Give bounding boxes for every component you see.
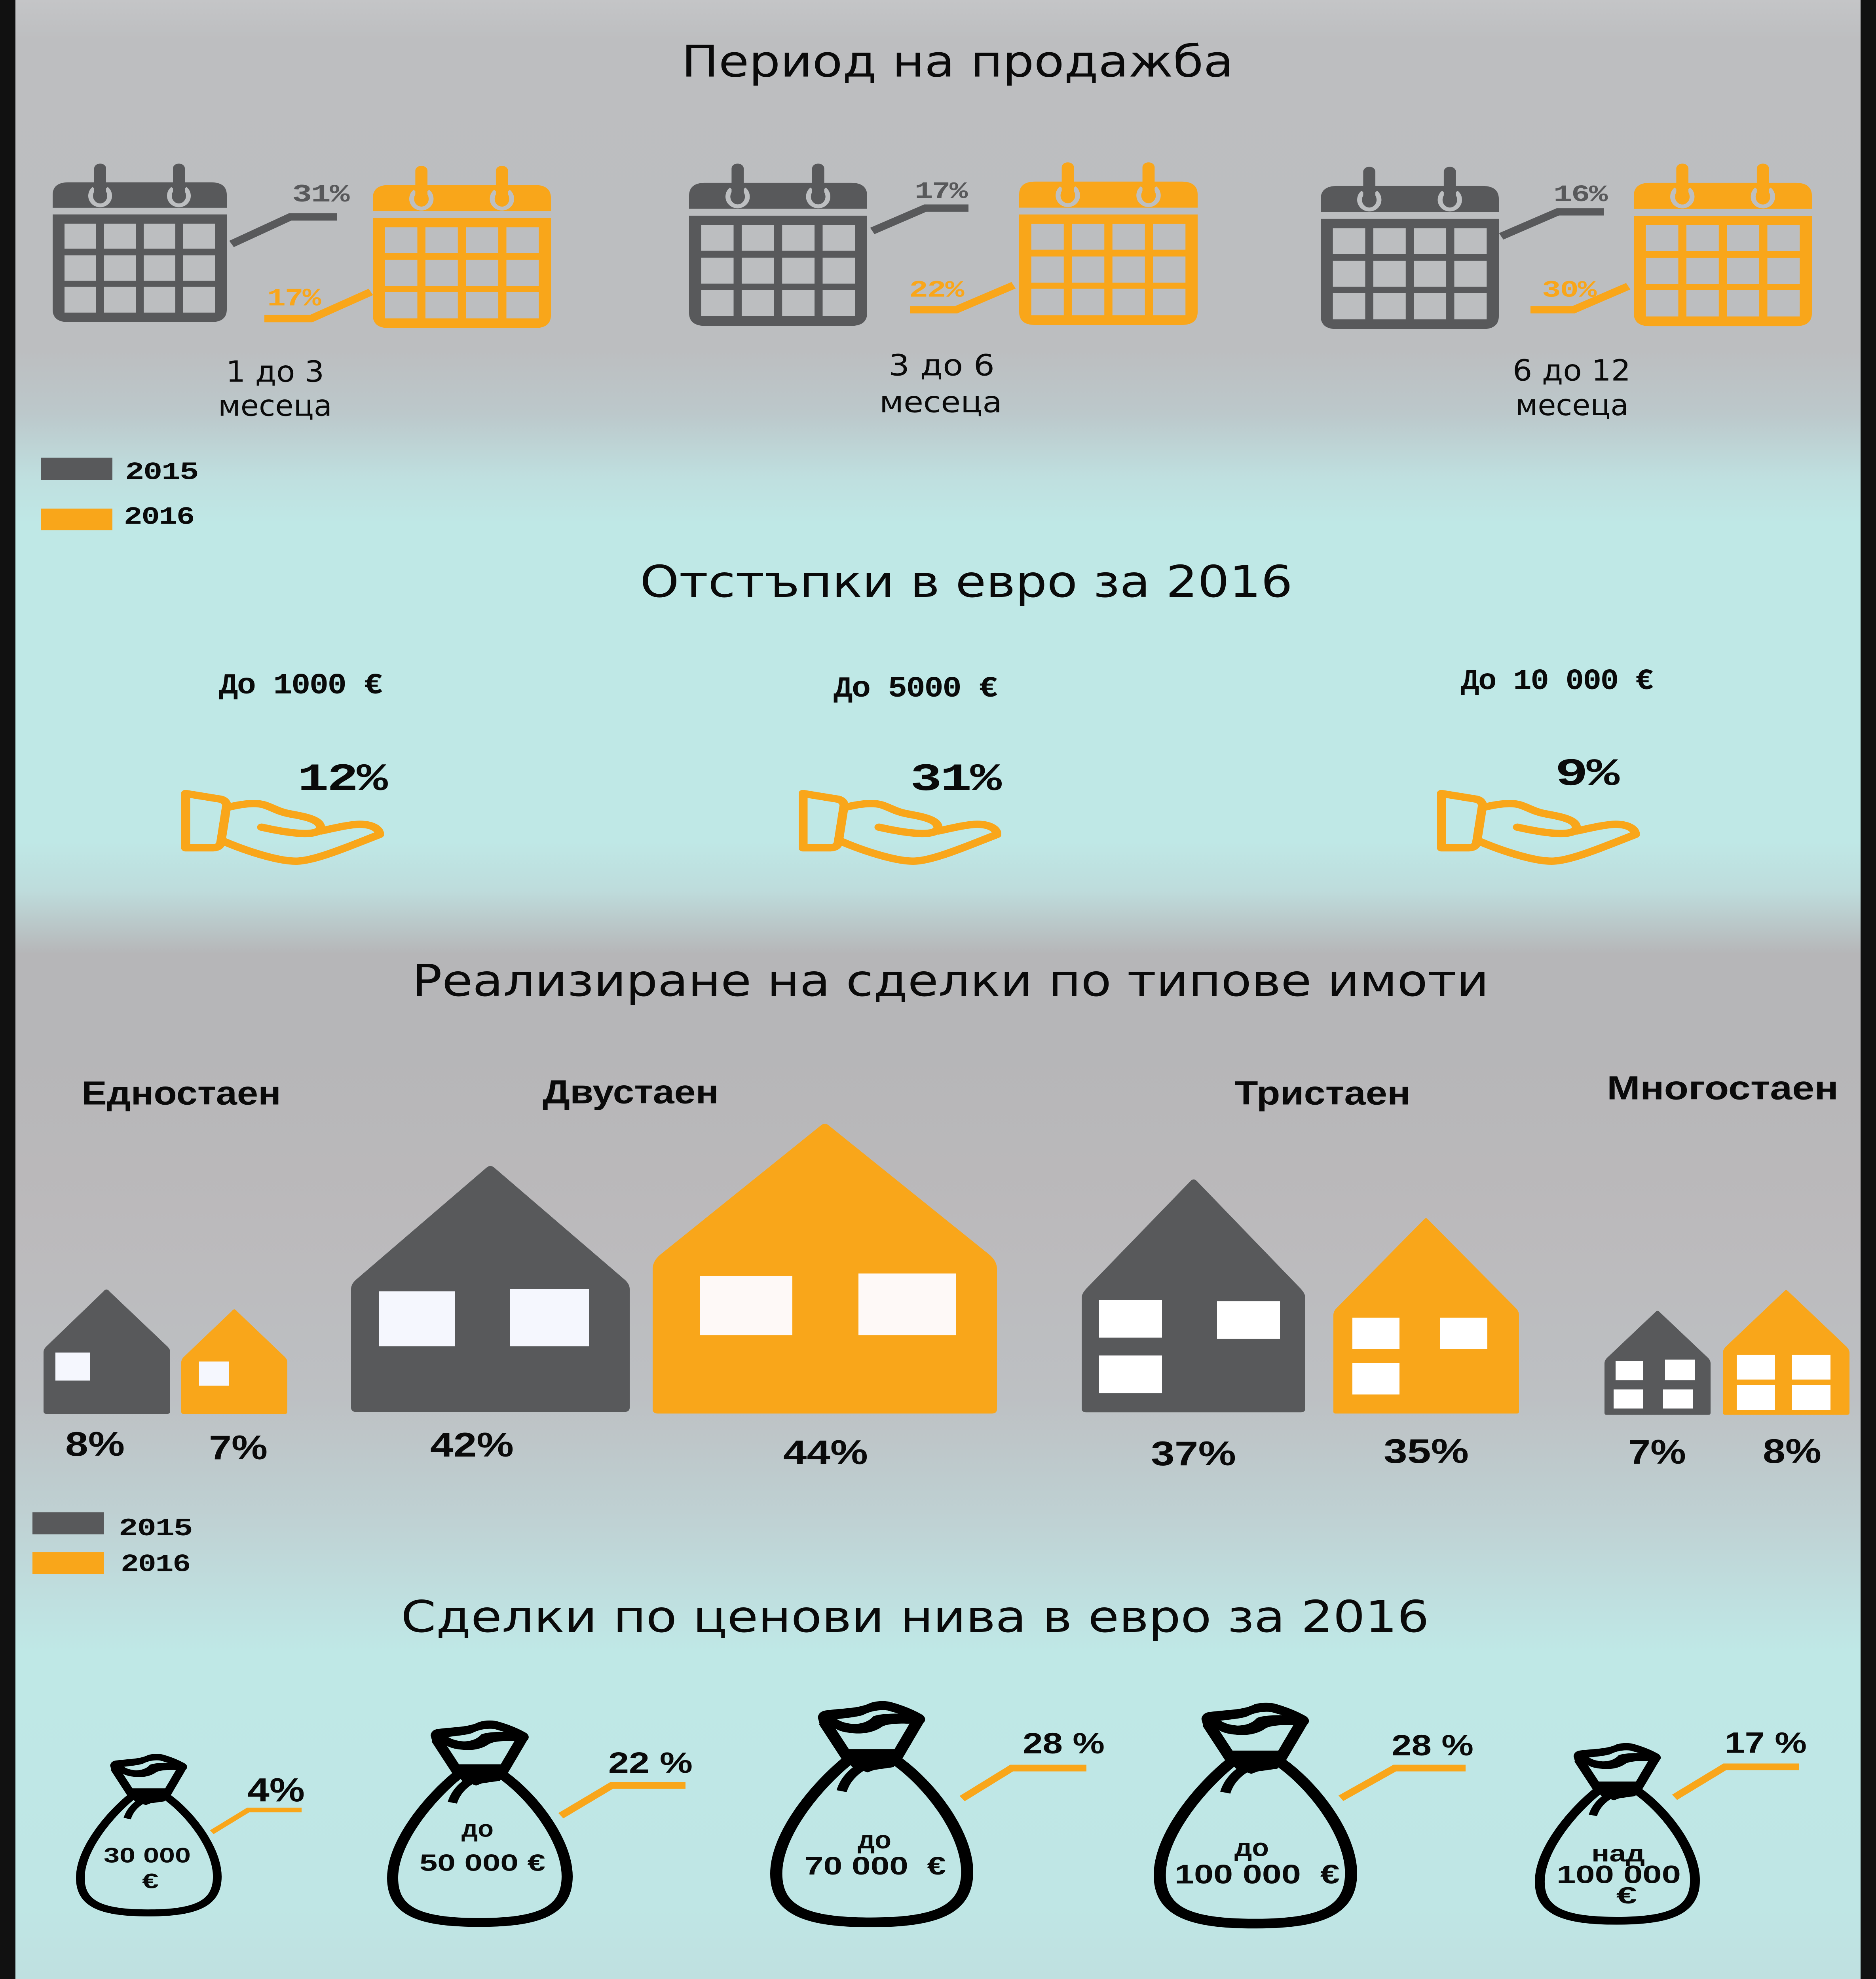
label: 1 до 3 [226,355,324,389]
calendar icon 2015 [689,163,867,326]
value 2016: 30% [1542,277,1597,304]
value: 31% [910,758,1002,802]
legend label 2016: 2016 [121,1551,190,1579]
value 2016: 22% [909,277,965,304]
icon: open hand [803,794,997,861]
bag label: 50 000 € [420,1850,545,1876]
calendar icon 2016 [373,166,551,328]
value 2016: 7% [209,1428,268,1467]
connector [561,1785,685,1816]
bag: up to 100 000 [1160,1703,1473,1924]
value 2016: 44% [783,1433,868,1472]
title: property types: Реализиране на сделки по типове имоти [412,955,1489,1007]
value 2015: 17% [915,179,968,205]
value: 12% [298,758,388,802]
title: price levels: Сделки по ценови нива в евро за 2016 [401,1591,1429,1642]
bag: 30 000 [80,1754,305,1913]
value 2016: 8% [1763,1432,1821,1470]
house 2016 [653,1124,997,1413]
calendar icon 2016 [1634,163,1812,326]
legend label 2016: 2016 [124,503,194,532]
section: sale period [41,36,1812,532]
house 2015 [1082,1179,1305,1412]
house 2016 [1333,1218,1519,1413]
bag label: 30 000 [104,1844,191,1867]
value: 4% [247,1772,305,1809]
bag: over 100 000 [1540,1726,1807,1921]
bag: up to 70 000 [776,1701,1105,1922]
group: two-room [351,1073,997,1472]
bag label: 100 000 [1557,1861,1681,1888]
group: one-room [44,1075,287,1467]
house 2016 [181,1309,287,1414]
value: 9% [1555,753,1620,797]
connector 2016 [1530,286,1628,310]
heading: Едностаен [82,1075,281,1112]
connector [1341,1768,1466,1798]
value: 28 % [1023,1727,1105,1760]
icon: money bag [776,1701,967,1922]
section: deals by property type [32,955,1849,1579]
swatch 2016 [32,1552,104,1574]
value: 17 % [1725,1726,1807,1759]
calendar icon 2015 [53,163,227,322]
bag label: до [461,1816,494,1842]
value 2016: 35% [1384,1432,1469,1470]
section: discounts [186,556,1653,861]
calendar icon 2016 [1019,162,1198,325]
bag label: € [142,1869,159,1893]
value: 28 % [1392,1729,1473,1762]
calendar icon 2015 [1321,167,1499,329]
value: 22 % [608,1746,693,1779]
group: three-room [1082,1075,1519,1473]
icon: money bag [1540,1743,1695,1921]
bag: up to 50 000 [393,1721,693,1922]
title: discounts: Отстъпки в евро за 2016 [640,556,1293,608]
legend [41,458,198,532]
label: 3 до 6 [889,348,995,382]
value 2016: 17% [267,285,321,313]
value 2015: 42% [430,1425,514,1464]
label: До 5000 € [834,673,997,706]
value 2015: 37% [1151,1434,1236,1473]
label: До 1000 € [219,670,382,703]
icon: money bag [393,1721,567,1922]
bag label: до [1234,1834,1269,1861]
label: 6 до 12 [1513,353,1631,387]
swatch 2015 [41,458,112,480]
legend [32,1512,192,1579]
house 2016 [1723,1290,1849,1415]
discount: up to 1000 [186,670,388,861]
value 2015: 8% [65,1424,125,1463]
value 2015: 31% [292,181,350,209]
swatch 2015 [32,1512,104,1534]
connector 2016 [910,285,1014,310]
connector 2015 [1501,212,1604,236]
icon: open hand [186,794,380,861]
title: sale period: Период на продажба [682,36,1234,87]
legend label 2015: 2015 [119,1515,192,1543]
group: multi-room [1604,1069,1849,1471]
swatch 2016 [41,509,112,530]
heading: Тристаен [1234,1075,1411,1112]
icon: money bag [80,1754,217,1913]
value 2015: 16% [1553,182,1608,209]
discount: up to 5000 [803,673,1002,861]
label: месеца [1515,388,1629,422]
value 2015: 7% [1628,1432,1686,1471]
legend label 2015: 2015 [125,459,198,487]
connector [1675,1767,1799,1797]
group: 3 to 6 months [689,162,1198,419]
house 2015 [44,1290,170,1414]
icon: money bag [1160,1703,1351,1924]
discount: up to 10000 [1441,665,1653,861]
group: 6 to 12 months [1321,163,1812,422]
section: deals by price level [80,1591,1807,1924]
bag label: 100 000 € [1175,1859,1340,1889]
house 2015 [351,1166,630,1412]
label: месеца [879,386,1002,419]
heading: Многостаен [1607,1069,1838,1107]
connector [212,1810,302,1832]
label: месеца [218,389,332,423]
bag label: до [858,1826,891,1854]
icon: open hand [1441,794,1635,861]
bag label: € [1616,1882,1637,1909]
group: 1 to 3 months [53,163,551,423]
heading: Двустаен [543,1073,719,1111]
connector 2015 [232,217,337,244]
connector 2015 [872,208,968,231]
connector 2016 [264,292,371,319]
bag label: над [1591,1840,1645,1867]
bag label: 70 000 € [805,1852,946,1880]
connector [962,1768,1086,1799]
house 2015 [1604,1311,1711,1415]
label: До 10 000 € [1461,665,1653,698]
